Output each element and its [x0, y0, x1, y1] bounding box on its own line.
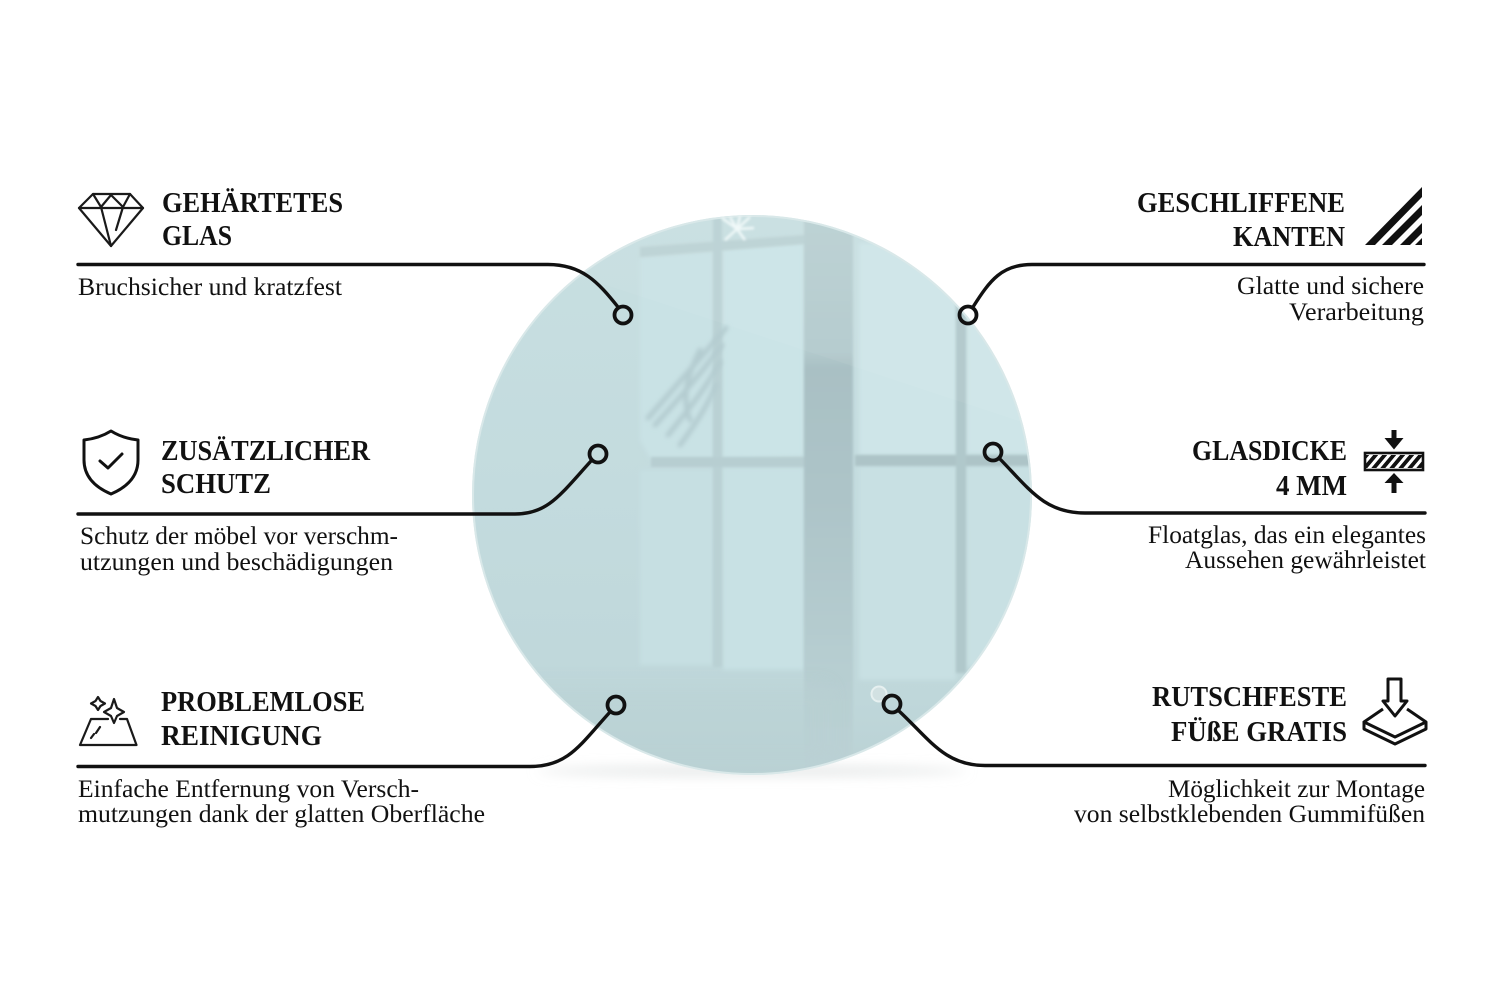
heading: KANTEN: [1233, 222, 1345, 253]
text: utzungen und beschädigungen: [80, 549, 394, 576]
heading: [162, 188, 343, 252]
heading: 4 MM: [1276, 471, 1347, 502]
icon: diamond: [79, 194, 143, 246]
heading: [1152, 682, 1347, 748]
rubber foot: [872, 686, 886, 702]
text: Glatte und sichere: [1237, 273, 1424, 300]
text: Möglichkeit zur Montage: [1168, 776, 1425, 803]
heading: GESCHLIFFENE: [1137, 188, 1345, 219]
callout: Glasdicke 4 mm: [984, 430, 1426, 574]
leader line: [960, 264, 1424, 324]
heading: [1192, 436, 1347, 502]
heading: PROBLEMLOSE: [161, 687, 365, 718]
icon: thickness: [1365, 430, 1423, 493]
text: [1148, 522, 1426, 574]
heading: SCHUTZ: [161, 469, 271, 500]
text: [1074, 776, 1426, 828]
text: [78, 776, 485, 828]
text: Schutz der möbel vor verschm-: [80, 523, 398, 550]
round glass panel: [460, 200, 1050, 790]
icon: shield: [84, 431, 138, 494]
leader line: [78, 696, 624, 766]
callout: Geschliffene Kanten: [960, 187, 1425, 326]
icon: polished edge stripes: [1365, 187, 1422, 245]
heading: RUTSCHFESTE: [1152, 682, 1347, 713]
text: [80, 523, 398, 576]
icon: sparkling surface: [80, 697, 136, 745]
heading: GLASDICKE: [1192, 436, 1347, 467]
heading: [161, 436, 371, 500]
icon: anti-slip foot: [1364, 679, 1426, 744]
callout: Zusätzlicher Schutz: [78, 431, 606, 576]
leader line: [78, 446, 606, 514]
text: [1237, 273, 1425, 326]
text: von selbstklebenden Gummifüßen: [1074, 801, 1426, 828]
leader line: [984, 444, 1425, 513]
text: Bruchsicher und kratzfest: [78, 274, 342, 301]
text: mutzungen dank der glatten Oberfläche: [78, 801, 485, 828]
text: Verarbeitung: [1289, 299, 1425, 326]
text: Aussehen gewährleistet: [1185, 547, 1426, 574]
leader line: [884, 696, 1425, 766]
text: Einfache Entfernung von Versch-: [78, 776, 419, 803]
heading: GLAS: [162, 221, 232, 252]
leader line: [78, 264, 632, 324]
heading: GEHÄRTETES: [162, 188, 343, 219]
glass shadow: [537, 767, 967, 775]
plant reflection: [648, 328, 726, 445]
heading: [161, 687, 365, 752]
heading: [1137, 188, 1345, 253]
callout: Gehärtetes Glas: [78, 188, 632, 324]
callout: Problemlose Reinigung: [78, 687, 624, 828]
text: Floatglas, das ein elegantes: [1148, 522, 1426, 549]
glare: [722, 216, 754, 240]
heading: ZUSÄTZLICHER: [161, 436, 371, 467]
callout: Rutschfeste Füße gratis: [884, 679, 1426, 828]
heading: FÜßE GRATIS: [1171, 717, 1347, 748]
heading: REINIGUNG: [161, 721, 322, 752]
